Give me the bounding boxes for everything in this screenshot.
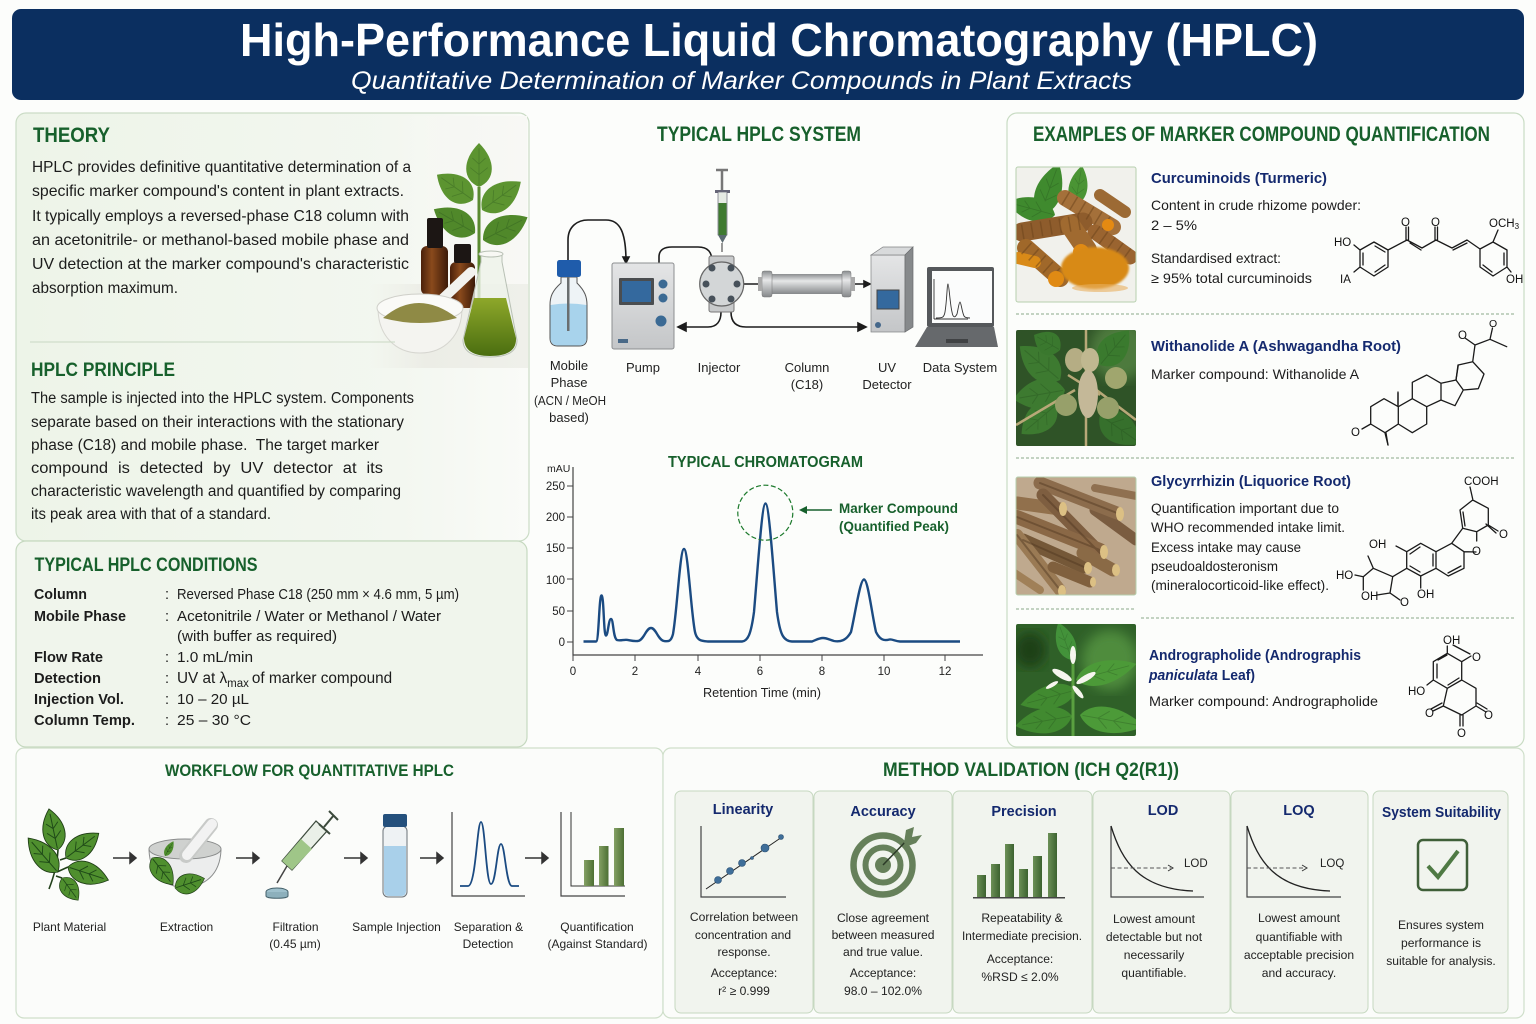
conditions table: 25 – 30 °C [177, 713, 251, 729]
card: LOQ: acceptable precision [1244, 948, 1354, 962]
diagram: tubing [568, 220, 870, 331]
structure: curcumin: OCH [1489, 218, 1515, 230]
card: LOD: quantifiable. [1121, 966, 1187, 980]
chart: typical chromatogram: Retention Time (min) [703, 685, 821, 700]
labels: system components: (ACN / MeOH [534, 393, 606, 408]
text: theory: UV detection at the marker compound's characteristic [32, 256, 409, 273]
callout: marker compound peak [738, 485, 958, 540]
panel: typical HPLC conditions [16, 541, 527, 747]
example: withanolide A [1010, 318, 1507, 456]
card: accuracy: Close agreement [837, 911, 930, 925]
card: LOD [1093, 791, 1230, 1013]
axis labels: 10 [878, 666, 890, 678]
structure: glycyrrhizin: OH [1417, 589, 1434, 601]
card: LOD: Lowest amount [1113, 912, 1196, 926]
structure: withanolide: O [1458, 330, 1467, 342]
conditions table: of marker compound [252, 670, 392, 687]
axis labels [546, 463, 951, 678]
axis labels: 200 [546, 512, 565, 524]
conditions table: : [165, 609, 169, 625]
card: linearity [675, 791, 813, 1013]
conditions table: UV at λ [177, 670, 227, 687]
chromatogram trace [584, 504, 960, 642]
heading: workflow: WORKFLOW FOR QUANTITATIVE HPLC [165, 762, 454, 780]
text: curcuminoids: ≥ 95% total curcuminoids [1151, 270, 1312, 286]
card: system suitability: Ensures system [1398, 918, 1484, 932]
labels: system components: based) [549, 410, 589, 425]
text: theory: an acetonitrile- or methanol-based mobile phase and [32, 232, 409, 249]
panel: method validation [663, 748, 1524, 1018]
text: glycyrrhizin: Excess intake may cause [1151, 540, 1301, 555]
labels: workflow steps: Separation & [454, 920, 523, 934]
card: accuracy: Accuracy [850, 804, 916, 820]
card: LOQ: Lowest amount [1258, 911, 1341, 925]
icon: mobile phase bottle [550, 260, 587, 346]
icon: LOD curve: LOD [1184, 858, 1208, 870]
labels: system components: Injector [698, 360, 741, 375]
icon: injector valve and syringe [700, 170, 744, 312]
arrow [525, 853, 548, 863]
card: system suitability [1373, 791, 1508, 1013]
card: system suitability: performance is [1401, 936, 1481, 950]
text: HPLC principle: The sample is injected into the HPLC system. Components [31, 390, 414, 407]
axis labels: 0 [559, 637, 565, 649]
axis labels: 0 [570, 666, 576, 678]
card: LOD: detectable but not [1106, 930, 1203, 944]
arrow [236, 853, 259, 863]
labels: system components: Mobile [550, 358, 588, 373]
card: LOQ: and accuracy. [1262, 966, 1336, 980]
text: curcuminoids: Standardised extract: [1151, 250, 1281, 266]
card: system suitability: suitable for analysis. [1386, 954, 1496, 968]
icon: column [758, 271, 855, 297]
card: precision: Acceptance: [987, 952, 1053, 966]
structure: andrographolide: O [1472, 652, 1481, 664]
icon: plant material [20, 807, 112, 905]
icon: UV detector [871, 247, 913, 332]
arrow [344, 853, 367, 863]
text: theory: absorption maximum. [32, 280, 178, 297]
axis labels: 6 [757, 666, 763, 678]
text: glycyrrhizin [1151, 473, 1351, 593]
structure: withanolide [1351, 318, 1507, 445]
text: theory [32, 159, 411, 297]
icon: check box [1418, 840, 1467, 890]
card: LOQ: quantifiable with [1256, 930, 1342, 944]
text: glycyrrhizin: Quantification important due to [1151, 501, 1339, 516]
icon: precision bars [973, 833, 1065, 898]
structure: andrographolide [1408, 635, 1493, 740]
card: precision: Intermediate precision. [962, 929, 1082, 943]
title banner [12, 9, 1524, 100]
panel: theory and HPLC principle [16, 113, 534, 541]
heading: method validation: METHOD VALIDATION (ICH Q2(R1)) [883, 760, 1179, 781]
example: curcuminoids [1004, 159, 1523, 302]
text: theory: It typically employs a reversed-phase C18 column with [32, 208, 409, 225]
card: LOQ [1231, 791, 1368, 1013]
text: curcuminoids: Curcuminoids (Turmeric) [1151, 170, 1327, 187]
panel: workflow for quantitative HPLC [16, 748, 663, 1018]
structure: glycyrrhizin: O [1400, 597, 1409, 609]
text: theory: specific marker compound's content in plant extracts. [32, 183, 404, 200]
icon: target [854, 827, 922, 894]
heading: system: TYPICAL HPLC SYSTEM [657, 123, 861, 146]
conditions table: max [227, 678, 249, 690]
labels: workflow steps: Extraction [160, 920, 213, 934]
conditions table: Column [34, 587, 87, 603]
structure: curcumin: HO [1334, 237, 1351, 249]
icon: separation chromatogram [452, 812, 525, 896]
example: andrographolide [1013, 619, 1493, 740]
card: LOQ: LOQ [1283, 803, 1315, 819]
text: andrographolide [1148, 647, 1378, 709]
icon: filtration syringe [266, 811, 338, 898]
labels: workflow steps: Quantification [560, 920, 634, 934]
structure: glycyrrhizin: HO [1336, 570, 1353, 582]
callout: marker compound peak: Marker Compound [839, 500, 958, 516]
axis labels: mAU [547, 463, 570, 475]
text: glycyrrhizin: WHO recommended intake limit. [1151, 520, 1345, 535]
illustration: plant, bottles, mortar and flask [370, 116, 534, 368]
icon: LOQ curve [1247, 826, 1344, 897]
panel: typical HPLC system [534, 123, 998, 425]
conditions table: Acetonitrile / Water or Methanol / Water [177, 609, 441, 625]
labels: workflow steps: Filtration [272, 920, 319, 934]
labels: system components: Pump [626, 360, 660, 375]
conditions table: Detection [34, 671, 101, 687]
conditions table: Reversed Phase C18 (250 mm × 4.6 mm, 5 µm) [177, 587, 459, 603]
structure: withanolide: O [1489, 318, 1497, 330]
icon: mortar and pestle extraction [144, 824, 221, 897]
text: curcuminoids: Content in crude rhizome powder: [1151, 197, 1361, 213]
axis labels: 100 [546, 575, 565, 587]
structure: curcumin: 3 [1515, 222, 1520, 231]
card: accuracy: Acceptance: [850, 966, 916, 980]
text: glycyrrhizin: Glycyrrhizin (Liquorice Root) [1151, 473, 1351, 490]
card: accuracy: and true value. [843, 945, 923, 959]
conditions table: Flow Rate [34, 650, 103, 666]
photo: liquorice root [1010, 477, 1136, 597]
labels: system components: Column [785, 360, 829, 375]
conditions table: : [165, 650, 169, 666]
card: linearity: r² ≥ 0.999 [718, 984, 770, 998]
conditions table: Mobile Phase [34, 609, 126, 625]
photo: turmeric [1016, 168, 1136, 302]
card: accuracy [814, 791, 952, 1013]
icon: LOD curve [1111, 826, 1208, 897]
arrow [113, 853, 136, 863]
card: linearity: Linearity [713, 802, 773, 818]
card: accuracy: 98.0 – 102.0% [844, 984, 922, 998]
conditions table: 10 – 20 µL [177, 692, 249, 708]
card: precision [953, 791, 1092, 1013]
panel: examples of marker compound quantification [1004, 113, 1524, 747]
card: system suitability: System Suitability [1382, 805, 1501, 821]
callout: marker compound peak: (Quantified Peak) [839, 518, 949, 534]
conditions table: : [165, 671, 169, 687]
structure: curcumin: OH [1506, 274, 1523, 286]
text: andrographolide: Marker compound: Andrographolide [1149, 693, 1378, 709]
axis labels: 4 [695, 666, 702, 678]
structure: curcumin [1334, 217, 1523, 286]
card: accuracy: between measured [832, 928, 934, 942]
photo: ashwagandha [1016, 330, 1136, 446]
conditions table: 1.0 mL/min [177, 650, 253, 666]
labels: system components: UV [878, 360, 896, 375]
labels: workflow steps: Sample Injection [352, 920, 441, 934]
axis labels: 8 [819, 666, 825, 678]
icon: sample vial [383, 814, 407, 897]
title: High-Performance Liquid Chromatography (HPLC) [240, 14, 1318, 66]
axis labels: 250 [546, 481, 565, 493]
axis labels: 12 [939, 666, 951, 678]
card: linearity: concentration and [695, 928, 791, 942]
text: andrographolide: paniculata Leaf) [1148, 667, 1255, 684]
conditions table: : [165, 692, 169, 708]
heading: theory: THEORY [33, 124, 110, 147]
icon: quantification bar chart [561, 812, 625, 896]
structure: glycyrrhizin: OH [1369, 539, 1386, 551]
text: theory: HPLC provides definitive quantitative determination of a [32, 159, 411, 176]
labels: system components: (C18) [791, 377, 823, 392]
text: andrographolide: Andrographolide (Andrographis [1149, 647, 1361, 664]
structure: glycyrrhizin [1336, 476, 1508, 609]
heading: chromatogram: TYPICAL CHROMATOGRAM [668, 454, 863, 471]
conditions table: Column Temp. [34, 713, 135, 729]
card: linearity: Acceptance: [711, 966, 777, 980]
conditions table: Injection Vol. [34, 692, 124, 708]
axis labels: 50 [552, 606, 565, 618]
icon: linearity plot [701, 826, 786, 897]
text: HPLC principle: characteristic wavelength and quantified by comparing [31, 483, 401, 500]
text: HPLC principle: phase (C18) and mobile phase. The target marker [31, 437, 379, 454]
conditions table: : [165, 713, 169, 729]
labels: workflow steps [33, 920, 648, 951]
card: linearity: Correlation between [690, 910, 798, 924]
structure: curcumin: O [1431, 217, 1440, 229]
labels: workflow steps: Plant Material [33, 920, 106, 934]
text: glycyrrhizin: (mineralocorticoid-like effect). [1151, 578, 1329, 593]
structure: glycyrrhizin: COOH [1464, 476, 1498, 488]
labels: workflow steps: (Against Standard) [547, 937, 648, 951]
text: HPLC principle: separate based on their interactions with the stationary [31, 414, 404, 431]
labels: system components: Phase [551, 375, 587, 390]
labels: workflow steps: (0.45 µm) [269, 937, 321, 951]
card: linearity: response. [717, 945, 771, 959]
conditions table: (with buffer as required) [177, 629, 337, 645]
labels: system components [534, 358, 997, 425]
icon: pump [612, 263, 674, 349]
axis labels: 2 [632, 666, 638, 678]
text: withanolide: Marker compound: Withanolide A [1151, 366, 1360, 382]
text: curcuminoids [1151, 170, 1361, 286]
heading: conditions: TYPICAL HPLC CONDITIONS [34, 555, 258, 576]
card: precision: Repeatability & [981, 911, 1063, 925]
labels: system components: Data System [923, 360, 997, 375]
example: glycyrrhizin [1010, 473, 1508, 609]
structure: curcumin: O [1401, 217, 1410, 229]
structure: andrographolide: O [1425, 708, 1434, 720]
text: HPLC principle: its peak area with that of a standard. [31, 506, 271, 523]
structure: andrographolide: HO [1408, 686, 1425, 698]
labels: workflow steps: Detection [463, 937, 513, 951]
structure: glycyrrhizin: O [1499, 529, 1508, 541]
structure: glycyrrhizin: OH [1361, 591, 1378, 603]
labels: system components: Detector [862, 377, 912, 392]
structure: andrographolide: OH [1443, 635, 1460, 647]
photo: andrographis [1016, 624, 1136, 736]
icon: data system laptop [915, 267, 998, 347]
card: precision: Precision [991, 804, 1057, 820]
axis labels: 150 [546, 543, 565, 555]
arrow [420, 853, 443, 863]
icon: LOQ curve: LOQ [1320, 858, 1344, 870]
text: glycyrrhizin: pseudoaldosteronism [1151, 559, 1278, 574]
structure: curcumin: IA [1340, 274, 1351, 286]
conditions table [34, 587, 459, 729]
heading: HPLC principle: HPLC PRINCIPLE [31, 360, 175, 381]
text: withanolide: Withanolide A (Ashwagandha Root) [1151, 338, 1401, 355]
chart: typical chromatogram [546, 454, 983, 700]
structure: andrographolide: O [1484, 710, 1493, 722]
text: HPLC principle [31, 390, 414, 523]
text: withanolide [1151, 338, 1401, 382]
subtitle: Quantitative Determination of Marker Compounds in Plant Extracts [351, 67, 1132, 95]
text: curcuminoids: 2 – 5% [1151, 217, 1197, 233]
card: LOD: necessarily [1124, 948, 1185, 962]
structure: glycyrrhizin: O [1472, 546, 1481, 558]
card: precision: %RSD ≤ 2.0% [981, 970, 1059, 984]
structure: withanolide: O [1351, 427, 1360, 439]
card: LOD: LOD [1148, 803, 1178, 819]
conditions table: : [165, 587, 169, 603]
text: HPLC principle: compound is detected by UV detector at its [31, 460, 383, 477]
structure: andrographolide: O [1457, 728, 1466, 740]
